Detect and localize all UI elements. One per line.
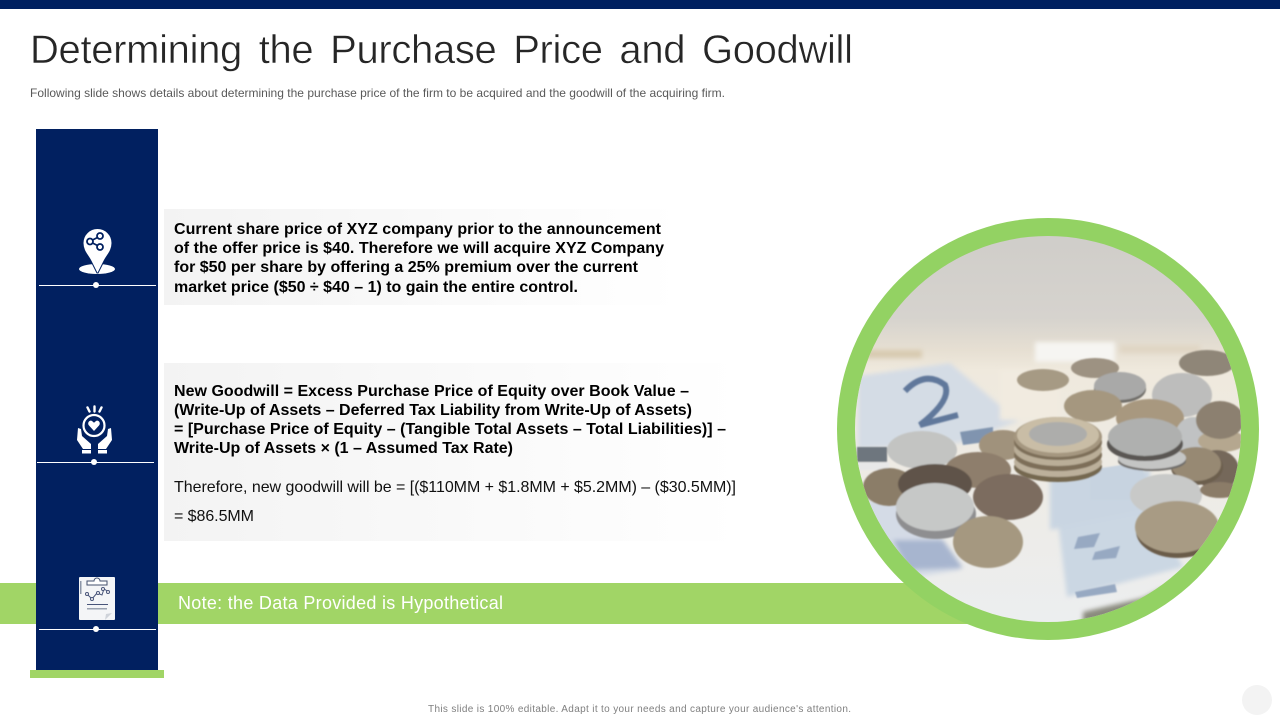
icon: clipboard with line chart	[79, 577, 115, 620]
panel: navy icon column	[30, 129, 164, 678]
panel: share price text	[164, 209, 680, 305]
icon: hands holding heart	[77, 406, 112, 454]
panel: share price text: Current share price of XYZ company prior to the announcement	[174, 221, 662, 238]
panel: share price text: market price ($50 ÷ $40 – 1) to gain the entire control.	[174, 279, 578, 296]
page number circle	[1242, 685, 1272, 715]
note text: Note: the Data Provided is Hypothetical	[178, 593, 503, 613]
panel: goodwill text: = [Purchase Price of Equity – (Tangible Total Assets – Total Liabilities)] –	[174, 421, 726, 438]
subtitle: Following slide shows details about determining the purchase price of the firm to be acquired and the goodwill of the acquiring firm.	[30, 86, 725, 100]
panel: goodwill text	[164, 363, 740, 541]
panel: goodwill text: (Write-Up of Assets – Deferred Tax Liability from Write-Up of Assets)	[174, 402, 692, 419]
title: Determining the Purchase Price and Goodwill	[30, 28, 853, 72]
footer note: This slide is 100% editable. Adapt it to your needs and capture your audience's attention.	[428, 704, 851, 715]
panel: goodwill text: = $86.5MM	[174, 508, 254, 525]
panel: share price text: for $50 per share by offering a 25% premium over the current	[174, 259, 639, 276]
panel: goodwill text: Write-Up of Assets × (1 – Assumed Tax Rate)	[174, 440, 513, 457]
panel: goodwill text: New Goodwill = Excess Purchase Price of Equity over Book Value –	[174, 383, 689, 400]
panel: share price text: of the offer price is $40. Therefore we will acquire XYZ Company	[174, 240, 664, 257]
top bar	[0, 0, 1280, 9]
photo: coins and banknotes in green ring	[837, 218, 1259, 640]
panel: goodwill text: Therefore, new goodwill will be = [($110MM + $1.8MM + $5.2MM) – ($30.5MM)]	[174, 479, 736, 496]
note band	[0, 583, 975, 624]
icon: location pin with share symbol	[79, 228, 115, 274]
